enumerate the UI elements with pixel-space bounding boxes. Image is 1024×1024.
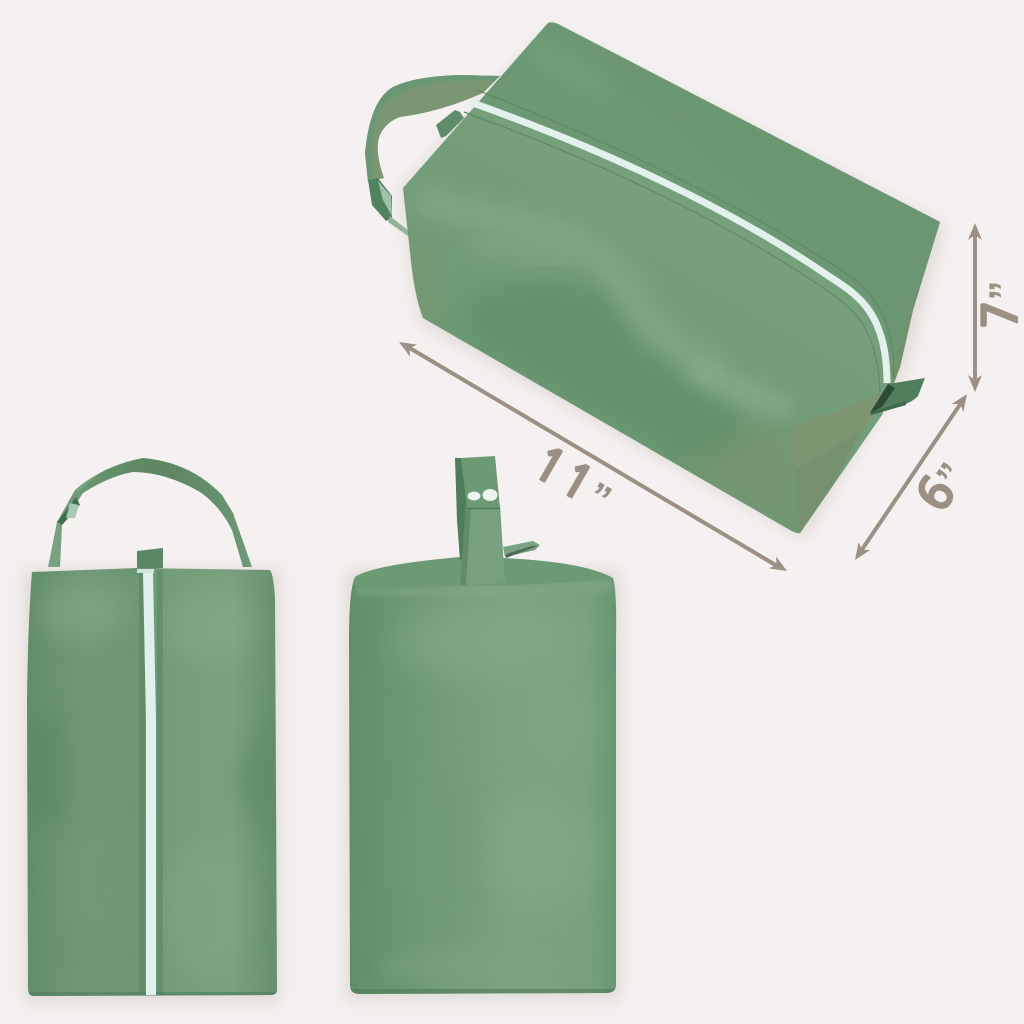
fabric shading [345,600,620,995]
arrow: 11 inch length [395,336,791,577]
left bag: front view with zipper [20,458,285,1000]
handle [48,458,252,567]
inner lip [355,557,613,586]
fabric shading [20,570,285,997]
arrow: 7 inch height [968,223,982,392]
end tab [870,378,925,415]
zipper tab [137,548,163,570]
label: 11 inches: 11” [524,439,623,524]
label: 6 inches: 6” [909,453,976,520]
top panel [470,18,945,400]
light fabric band [427,198,708,364]
bag body [20,560,285,1000]
small side tab [503,541,540,557]
strap with snaps [455,456,505,585]
right bag: back view [345,456,620,997]
arrow: 6 inch depth [849,390,973,564]
handle strap [365,75,500,236]
zipper [470,102,887,383]
lower right olive shading [692,436,789,530]
zipper [137,569,156,995]
bag body [345,555,620,997]
dark fabric patch [460,283,737,470]
right end panel [793,392,885,535]
left end olive shading [408,236,422,314]
bag body [403,22,940,534]
top bag: angled view [365,22,940,534]
snap buttons [468,492,480,500]
small loop tab [436,110,464,138]
dimension arrows [395,223,1024,577]
zipper stitching [477,90,894,378]
